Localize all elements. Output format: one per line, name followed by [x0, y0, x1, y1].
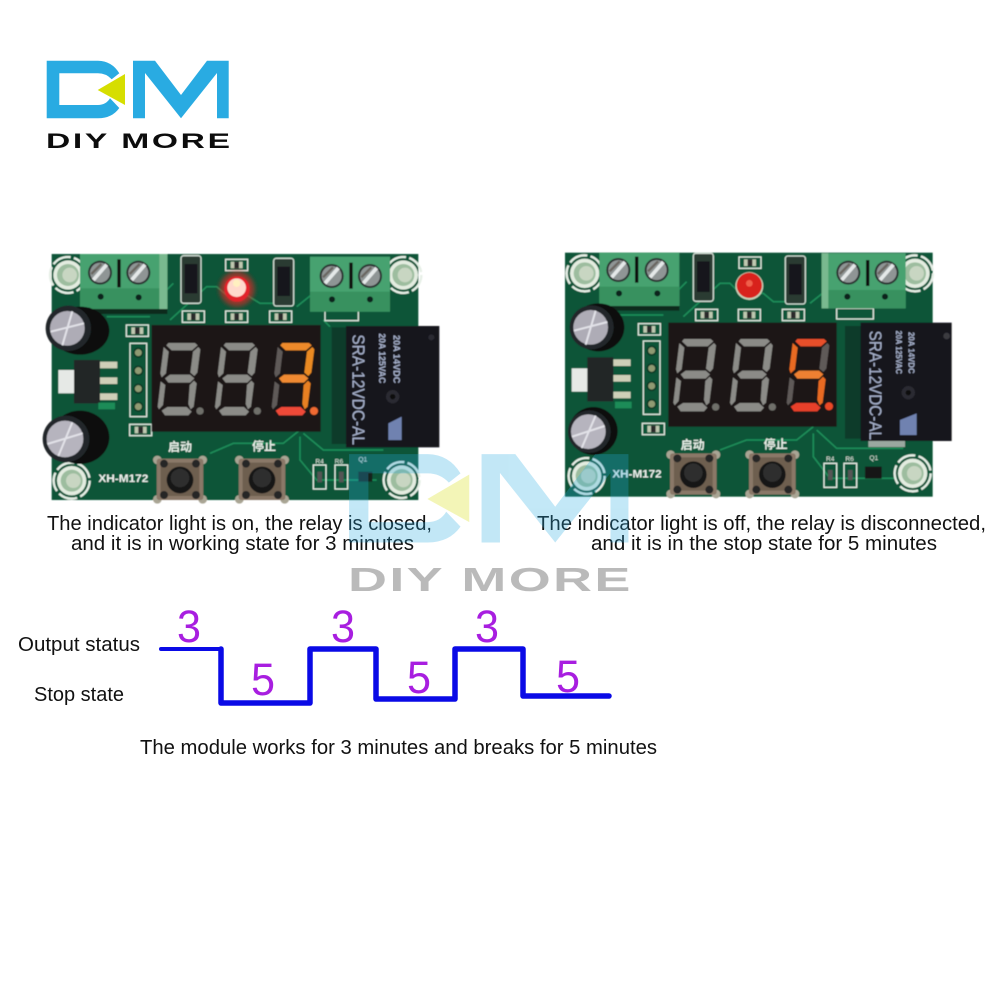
- logo letter M: [133, 61, 229, 118]
- resistors and transistor: [313, 457, 372, 489]
- caption: right module: [537, 513, 986, 555]
- start button: [153, 439, 207, 504]
- logo wordmark: DIY MORE: [46, 129, 230, 152]
- resistors and transistor: R6: [845, 456, 854, 463]
- durations: 3: [475, 601, 499, 652]
- label: stop state: Stop state: [34, 684, 124, 706]
- circuit board: [565, 253, 933, 497]
- resistors and transistor: R6: [335, 458, 343, 465]
- left terminal block: [599, 253, 679, 311]
- stop button: 停止: [252, 439, 276, 454]
- voltage regulator: [572, 357, 632, 408]
- logo triangle: [98, 74, 125, 105]
- logo letter D: [47, 61, 119, 118]
- durations: [177, 601, 580, 705]
- caption: right module: and it is in the stop state for 5 minutes: [591, 533, 937, 555]
- durations: 5: [407, 652, 431, 703]
- capacitor bottom: [43, 411, 109, 464]
- smd parts: [638, 257, 804, 435]
- stop button: [745, 436, 799, 498]
- resistors and transistor: Q1: [869, 455, 879, 462]
- durations: 5: [251, 654, 275, 705]
- watermark: DIY MORE logo: [348, 454, 630, 599]
- left terminal block: [80, 254, 167, 314]
- relay: [332, 326, 439, 447]
- voltage regulator: [58, 360, 117, 409]
- start button: 启动: [168, 439, 192, 454]
- timing diagram: [18, 601, 657, 759]
- label: output status: Output status: [18, 634, 140, 656]
- board model label: XH-M172: [98, 473, 148, 485]
- smd parts: [126, 259, 292, 436]
- durations: 5: [556, 651, 580, 702]
- mounting holes: [50, 257, 421, 499]
- resistors and transistor: R4: [315, 458, 324, 465]
- resistors and transistor: Q1: [358, 457, 368, 464]
- square waveform: [161, 649, 609, 703]
- board model label: XH-M172: [612, 469, 662, 481]
- caption: left module: and it is in working state for 3 minutes: [71, 533, 414, 555]
- diodes: [181, 256, 294, 306]
- logo: DIY MORE: [46, 61, 230, 152]
- panel: left module, relay closed: [43, 254, 439, 504]
- pin header: [643, 341, 660, 414]
- right terminal block: [822, 253, 906, 319]
- start button: [666, 437, 720, 498]
- caption: left module: The indicator light is on, the relay is closed,: [47, 513, 432, 535]
- durations: 3: [177, 601, 201, 652]
- durations: 3: [331, 601, 355, 652]
- watermark: DIY MORE logo: DIY MORE: [348, 560, 630, 599]
- seven-segment display showing 5: [668, 323, 837, 427]
- relay: 20A 125VAC: [894, 331, 904, 375]
- caption: left module: [47, 513, 432, 555]
- mounting holes: [567, 255, 933, 494]
- capacitor top: [46, 306, 109, 355]
- diagram caption: The module works for 3 minutes and breaks for 5 minutes: [140, 737, 657, 759]
- right terminal block: [310, 257, 390, 321]
- relay: [845, 323, 952, 447]
- stop button: [235, 439, 289, 504]
- relay: SRA-12VDC-AL: [865, 331, 885, 440]
- resistors and transistor: [824, 455, 882, 487]
- caption: right module: The indicator light is off, the relay is disconnected,: [537, 513, 986, 535]
- panel: right module, relay disconnected: [565, 253, 952, 498]
- pin header: [130, 343, 147, 417]
- capacitor top: [570, 303, 624, 351]
- relay: 20A 14VDC: [907, 332, 917, 374]
- circuit board: [52, 254, 418, 500]
- resistors and transistor: R4: [826, 456, 835, 463]
- capacitor bottom: [568, 407, 618, 455]
- seven-segment display showing 3: [152, 325, 321, 432]
- relay: SRA-12VDC-AL: [349, 334, 369, 445]
- start button: 启动: [681, 437, 705, 452]
- relay: 20A 14VDC: [391, 335, 401, 384]
- indicator light: on: [220, 272, 254, 306]
- indicator light: off: [735, 272, 763, 300]
- relay: 20A 125VAC: [377, 333, 387, 384]
- diodes: [693, 253, 805, 304]
- stop button: 停止: [764, 436, 788, 451]
